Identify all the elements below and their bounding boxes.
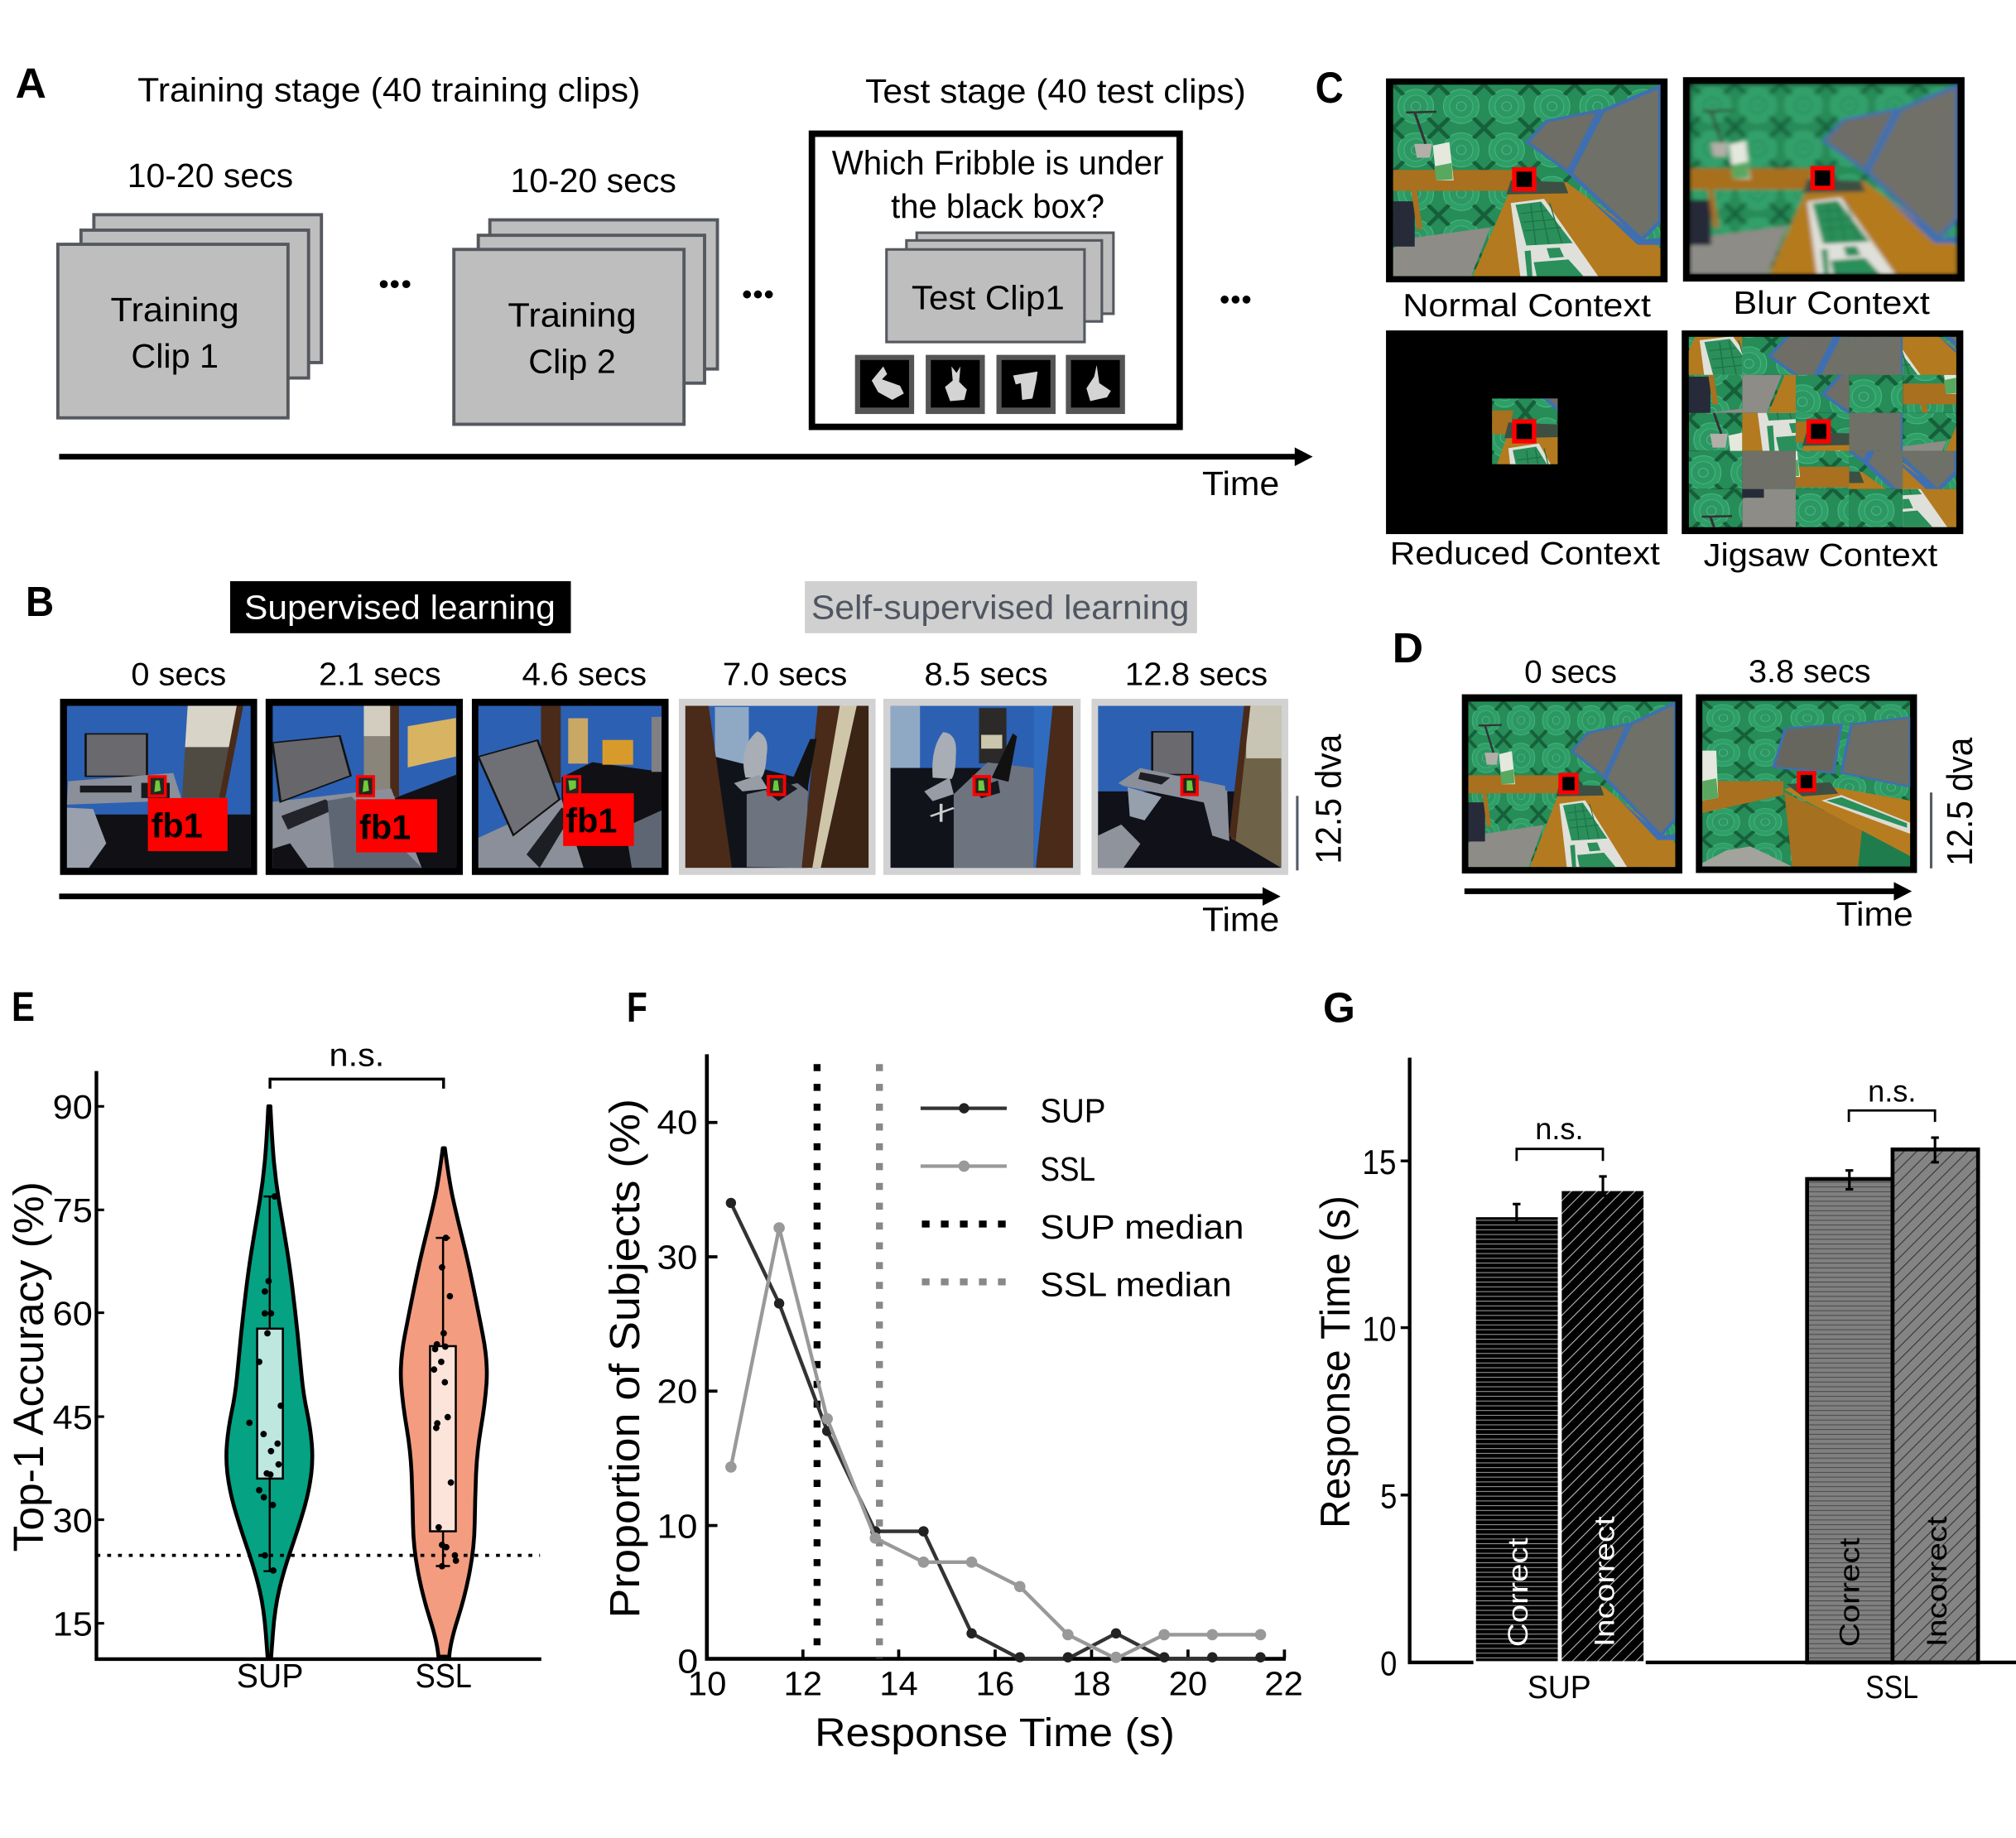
bar labels: correct and incorrect: Incorrect: [1590, 1516, 1621, 1647]
axes F with ticks: 30: [657, 1239, 697, 1277]
panel G: bars of response time by outcome: [1312, 984, 2016, 1706]
ellipsis 1: [380, 280, 411, 288]
bar labels: correct and incorrect: Correct: [1503, 1537, 1534, 1647]
axes F with ticks: 0: [677, 1642, 698, 1680]
time arrow D: [1465, 882, 1912, 901]
training clip 1 stack: Clip 1: [131, 337, 219, 375]
reduced context image: [1386, 313, 1667, 534]
chance level line: [96, 1554, 540, 1557]
panel E: violin plot of accuracy: [5, 984, 541, 1695]
axes G with ticks: [1362, 1057, 2016, 1682]
training clip 2 stack: Training: [508, 296, 637, 334]
data points SUP: [246, 1193, 284, 1574]
frame 2 with fb1 label: [266, 699, 463, 875]
axes F with ticks: 10: [657, 1507, 697, 1545]
time arrow B: [59, 888, 1281, 906]
category label SSL E: SSL: [416, 1657, 472, 1695]
frame 3 with fb1 label: [472, 699, 669, 875]
time arrow A: [59, 447, 1313, 466]
label reduced context: Reduced Context: [1390, 536, 1660, 572]
y axis E with ticks: 15: [53, 1605, 93, 1643]
ellipsis 2: [743, 291, 772, 298]
label jigsaw context: Jigsaw Context: [1704, 537, 1937, 573]
time label 8.5 secs: 8.5 secs: [925, 657, 1048, 693]
scale bar B: [1296, 796, 1298, 870]
bar SSL incorrect: [1893, 1149, 1978, 1662]
significance bracket SUP: [1517, 1149, 1603, 1161]
bar labels: correct and incorrect: Correct: [1835, 1537, 1866, 1647]
axes F with ticks: 10: [688, 1665, 726, 1703]
bar SUP incorrect: [1561, 1190, 1645, 1662]
panel letter A: A: [16, 60, 46, 107]
axes F with ticks: 20: [657, 1372, 697, 1410]
frame 2 with fb1 label: fb1: [359, 807, 411, 846]
frame 3 with fb1 label: fb1: [565, 801, 617, 840]
blur context image: [1683, 77, 1965, 281]
scale label D: 12.5 dva: [1941, 737, 1980, 866]
legend F: SSL median: [1040, 1266, 1232, 1304]
time label B: Time: [1202, 900, 1279, 938]
y axis E with ticks: 45: [53, 1398, 93, 1436]
axes F with ticks: 40: [657, 1104, 697, 1142]
self-supervised learning tag: [805, 581, 1197, 633]
heading: test stage: Test stage (40 test clips): [865, 72, 1246, 110]
frame 1 with fb1 label: fb1: [152, 806, 203, 845]
significance bracket SSL: [1849, 1110, 1935, 1122]
axes F with ticks: 18: [1072, 1665, 1111, 1703]
scale bar D: [1930, 792, 1932, 868]
bar labels: correct and incorrect: Incorrect: [1922, 1516, 1953, 1647]
test trial box: Which Fribble is under: [832, 143, 1163, 181]
label blur context: Blur Context: [1733, 286, 1930, 321]
time label 12.8 secs: 12.8 secs: [1125, 657, 1268, 693]
legend F: SSL: [1040, 1150, 1095, 1188]
box plot SUP: [257, 1196, 283, 1571]
supervised learning tag: Supervised learning: [244, 589, 556, 627]
duration label clip 2: 10-20 secs: [511, 161, 676, 200]
label normal context: Normal Context: [1403, 288, 1651, 324]
axes F with ticks: 22: [1264, 1665, 1303, 1703]
axes G with ticks: 0: [1380, 1643, 1397, 1682]
category label SUP E: SUP: [237, 1657, 303, 1695]
self-supervised learning tag: Self-supervised learning: [811, 589, 1189, 627]
frame 6 self-supervised: [1091, 699, 1288, 875]
time label 2.1 secs: 2.1 secs: [319, 657, 441, 693]
category label SSL G: SSL: [1865, 1670, 1918, 1706]
legend F: SUP median: [1040, 1208, 1244, 1246]
bar SUP correct: [1475, 1216, 1559, 1662]
time label A: Time: [1202, 464, 1279, 503]
SUP line series: [726, 1198, 1266, 1662]
panel letter F: F: [627, 984, 647, 1031]
SSL median line: [878, 1064, 882, 1658]
violin SUP: [226, 1106, 312, 1657]
axes F with ticks: 20: [1169, 1665, 1207, 1703]
n.s. label E: n.s.: [330, 1037, 384, 1073]
panel C: context conditions: [1316, 64, 2016, 680]
jigsaw context image: [1475, 223, 2016, 680]
y axis title G: Response Time (s): [1312, 1196, 1359, 1528]
frame D1: [1462, 695, 1682, 873]
supervised learning tag: [230, 581, 571, 633]
heading: training stage: Training stage (40 training clips): [137, 71, 640, 109]
data points SSL: [431, 1234, 459, 1570]
test trial box: Test Clip1: [912, 278, 1065, 316]
axes G with ticks: 15: [1362, 1143, 1396, 1181]
error bars: [1513, 1138, 1939, 1223]
time label 0 secs: 0 secs: [131, 657, 226, 693]
box plot SSL: [430, 1238, 456, 1566]
training clip 2 stack: [454, 220, 718, 424]
axes G with ticks: 5: [1380, 1477, 1397, 1516]
category label SUP G: SUP: [1528, 1670, 1591, 1706]
axes G with ticks: 10: [1362, 1310, 1396, 1349]
y axis E with ticks: [53, 1071, 541, 1659]
bar SSL correct: [1807, 1179, 1893, 1662]
legend F: SUP: [1040, 1092, 1106, 1130]
duration label clip 1: 10-20 secs: [128, 156, 293, 195]
violin SSL: [401, 1148, 487, 1657]
y axis E with ticks: 60: [53, 1294, 93, 1332]
SUP median line: [815, 1064, 820, 1658]
training clip 1 stack: [58, 214, 321, 418]
y axis title E: Top-1 Accuracy (%): [5, 1181, 52, 1552]
axes F with ticks: 16: [976, 1665, 1014, 1703]
panel letter B: B: [26, 578, 54, 625]
panel letter D: D: [1393, 624, 1423, 671]
axes F with ticks: [657, 1054, 1303, 1703]
panel B: clip frames timeline: [26, 578, 1350, 938]
axes F with ticks: 12: [784, 1665, 822, 1703]
test trial box: the black box?: [891, 187, 1104, 225]
training clip 1 stack: Training: [111, 291, 239, 329]
y axis E with ticks: 30: [53, 1501, 93, 1539]
test trial box: [812, 134, 1180, 427]
scale label B: 12.5 dva: [1310, 734, 1350, 864]
panel letter C: C: [1316, 64, 1344, 113]
SSL line series: [725, 1222, 1266, 1663]
n.s. label SUP: n.s.: [1535, 1111, 1584, 1146]
panel D: context change frames: [1393, 624, 1980, 933]
frame 5 self-supervised: [883, 699, 1080, 875]
ellipsis 3: [1220, 296, 1250, 304]
x axis title F: Response Time (s): [815, 1710, 1175, 1755]
training clip 2 stack: Clip 2: [528, 342, 616, 380]
axes F with ticks: 14: [879, 1665, 918, 1703]
time label D 0 secs: 0 secs: [1524, 655, 1617, 690]
time label D: Time: [1836, 895, 1913, 933]
panel A: training and test stage timeline: [16, 60, 1313, 503]
frame D2: [1696, 695, 1917, 873]
n.s. label SSL: n.s.: [1868, 1073, 1916, 1108]
panel letter G: G: [1323, 984, 1355, 1032]
frame 1 with fb1 label: [60, 699, 257, 875]
normal context image: [1386, 79, 1667, 282]
panel F: response time distribution: [601, 984, 1303, 1755]
frame 4 self-supervised: [679, 699, 876, 875]
time label 7.0 secs: 7.0 secs: [723, 657, 847, 693]
bar labels: correct and incorrect: [1503, 1516, 1953, 1647]
y axis title F: Proportion of Subjects (%): [601, 1099, 648, 1619]
legend F: [921, 1092, 1244, 1304]
y axis E with ticks: 75: [53, 1191, 93, 1229]
time label D 3.8 secs: 3.8 secs: [1749, 654, 1871, 690]
panel letter E: E: [12, 984, 35, 1030]
y axis E with ticks: 90: [53, 1088, 93, 1126]
significance bracket E: [270, 1079, 444, 1089]
time label 4.6 secs: 4.6 secs: [522, 657, 647, 693]
